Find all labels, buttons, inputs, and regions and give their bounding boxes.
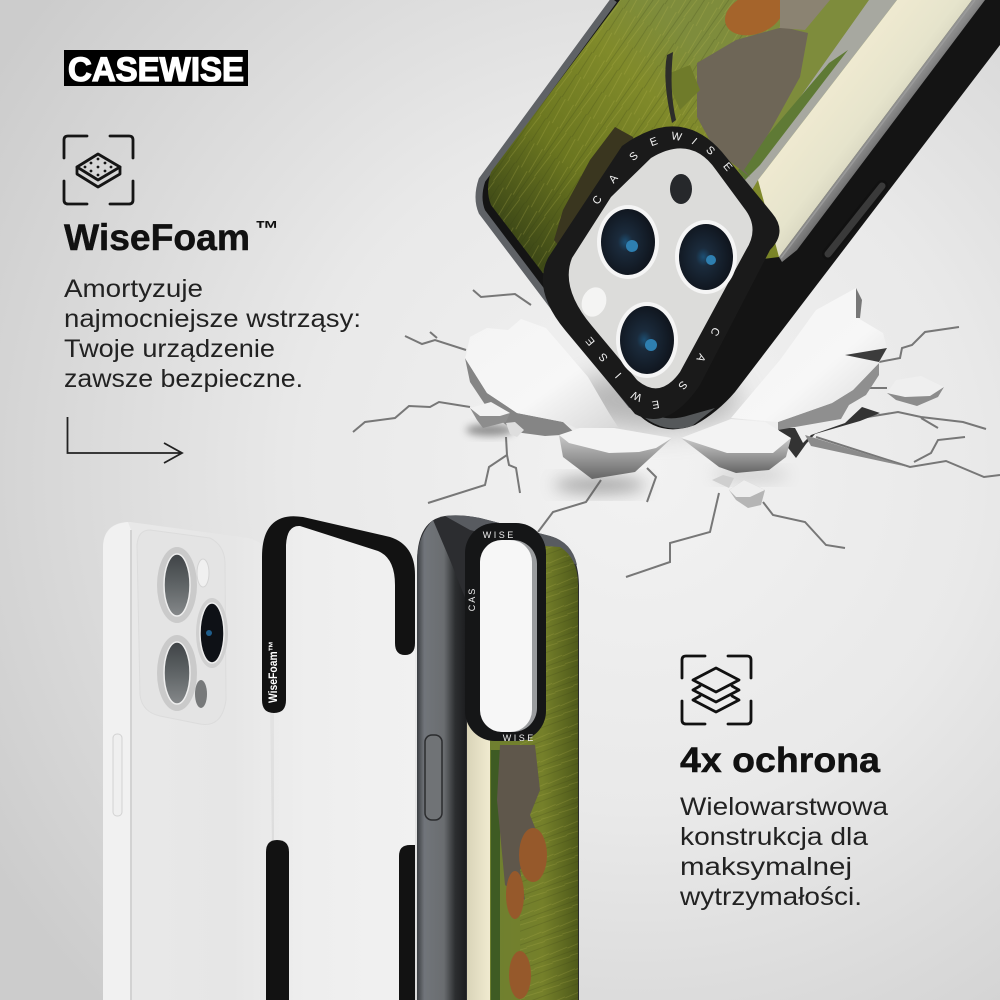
- text block: 4x protection description: Wielowarstwowa: [680, 793, 888, 821]
- lens 1: [597, 205, 659, 279]
- ring lettering: E: [648, 135, 659, 149]
- phone: top tilted with printed case: [477, 0, 1000, 429]
- ring lettering: A: [693, 351, 708, 364]
- case body: [417, 515, 579, 1000]
- side button: [828, 186, 882, 254]
- camera lens lower: [157, 635, 197, 711]
- flash: [197, 559, 209, 587]
- foam strip lower right: [399, 845, 415, 1000]
- ring lettering: A: [607, 172, 621, 186]
- flash: [578, 284, 610, 320]
- text block: 4x protection description: [679, 793, 888, 911]
- sensor: [670, 174, 692, 204]
- metallic side: [417, 520, 466, 1000]
- text block: WiseFoam description: zawsze bezpieczne.: [64, 365, 303, 393]
- ring lettering: [467, 530, 533, 743]
- arrow: [68, 417, 182, 463]
- logo: CASEWISE: CASEWISE: [68, 51, 244, 89]
- strip label: WiseFoam: WiseFoam™: [266, 641, 280, 703]
- ring lettering: S: [597, 350, 611, 364]
- text block: 4x protection description: maksymalnej: [680, 853, 852, 881]
- ring lettering: W: [629, 388, 644, 403]
- side button: [113, 734, 122, 816]
- ring lettering: S: [703, 144, 717, 158]
- top edge: [445, 515, 577, 565]
- camera lens upper: [157, 547, 197, 623]
- phone: case side view: [417, 515, 579, 1000]
- rubble: dark fissure right: [778, 407, 880, 458]
- heading: WiseFoam: ™: [255, 216, 279, 241]
- rhino: [497, 745, 540, 900]
- sensor: [195, 680, 207, 708]
- camera plate: [569, 148, 753, 388]
- camera window: [480, 540, 532, 732]
- lens 2: [675, 220, 737, 294]
- foam strip lower left: [266, 840, 289, 1000]
- ring lettering: W: [670, 130, 683, 144]
- shadow: crater around impact: [466, 370, 788, 493]
- phone: white iPhone back: [103, 522, 274, 1000]
- translucent side band: [779, 0, 985, 262]
- ring lettering: C: [707, 325, 722, 338]
- ring lettering: E: [584, 334, 598, 348]
- bottom corner highlight: [634, 405, 715, 429]
- ring lettering: W I S E: [483, 530, 513, 540]
- text block: 4x protection description: konstrukcja dla: [680, 823, 868, 851]
- case body: [477, 0, 1000, 429]
- cracks in wall: [353, 290, 1000, 577]
- icon: foam pad in focus frame: [64, 136, 133, 204]
- foam interior panel: [274, 520, 415, 1000]
- ring lettering: C: [590, 194, 605, 207]
- green strip: [491, 750, 500, 1000]
- ring lettering: E: [651, 397, 660, 411]
- ring lettering: S: [627, 150, 641, 164]
- heading: 4x ochrona: 4x ochrona: [680, 741, 881, 780]
- camera ring: [465, 523, 546, 741]
- ring lettering: I: [613, 370, 624, 380]
- lens 3: [616, 302, 678, 378]
- ring lettering: S: [675, 378, 689, 392]
- text block: WiseFoam description: najmocniejsze wstrząsy:: [64, 305, 361, 333]
- rubble: right slab: [731, 288, 887, 430]
- camera lens right: [196, 598, 228, 668]
- grass print: [490, 545, 578, 1000]
- heading: WiseFoam: WiseFoam: [64, 217, 250, 258]
- ring lettering: C A S: [467, 589, 477, 611]
- icon: layers in focus frame: [682, 656, 751, 724]
- left bumper: [479, 0, 632, 406]
- camera plateau: [137, 530, 226, 724]
- camera ring: [543, 126, 780, 419]
- giraffe spots: [506, 828, 547, 999]
- side button: [425, 735, 442, 820]
- rubble: small rocks: [470, 376, 944, 508]
- WiseFoam black foam strip top: [262, 516, 415, 713]
- side strip: [103, 522, 131, 1000]
- camera window bevel: [480, 540, 537, 732]
- ring lettering: E: [720, 160, 734, 174]
- ring lettering: W I S E: [503, 733, 533, 743]
- text block: WiseFoam description: Twoje urządzenie: [64, 335, 275, 363]
- rubble: wedge: [805, 435, 908, 467]
- text block: WiseFoam description: [64, 275, 361, 393]
- ring lettering: I: [689, 136, 699, 147]
- ring lettering: [584, 130, 734, 411]
- text block: 4x protection description: wytrzymałości.: [679, 883, 862, 911]
- text block: WiseFoam description: Amortyzuje: [64, 275, 203, 303]
- rubble: left slab: [465, 319, 618, 436]
- beach print: [467, 700, 492, 1000]
- rubble: centre slabs: [559, 419, 791, 479]
- printed artwork: [488, 0, 972, 285]
